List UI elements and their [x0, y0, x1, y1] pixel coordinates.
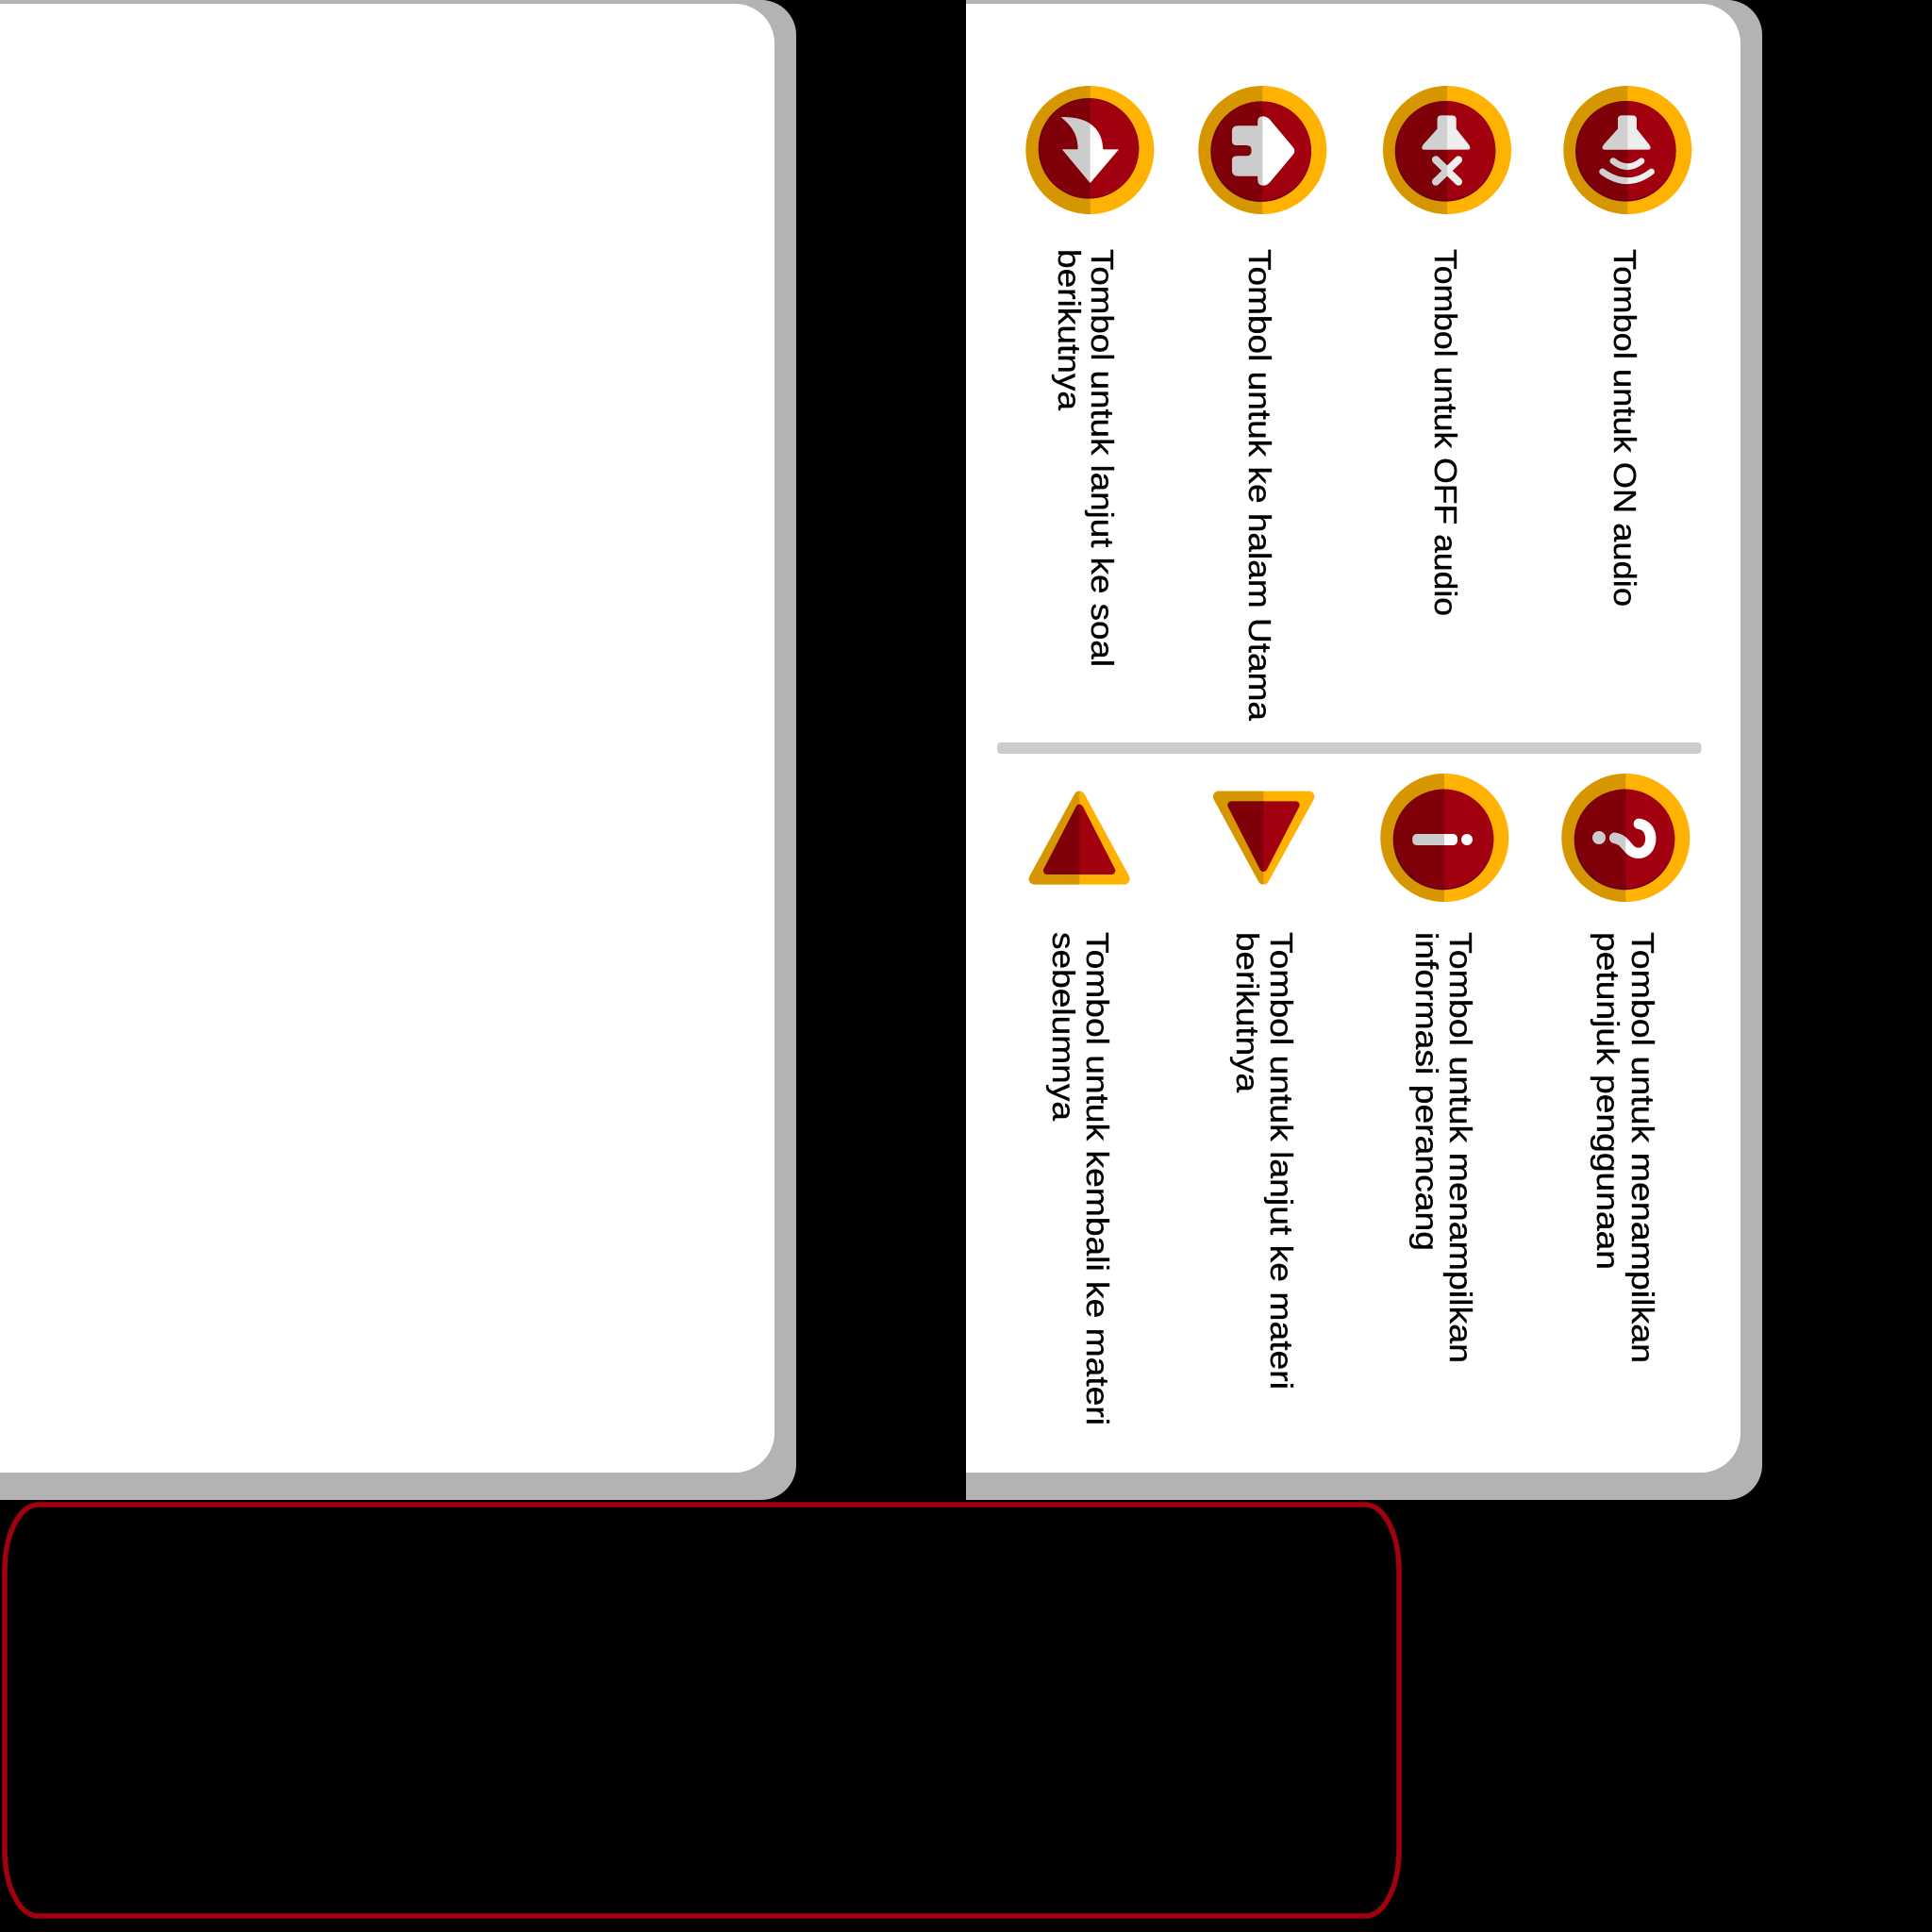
panel: left empty card: [0, 0, 796, 1500]
panel: button legend card: [966, 0, 1762, 1500]
icon: home page button: [1198, 86, 1326, 214]
text: designer information label: informasi perancang: [1409, 932, 1444, 1251]
icon: next material triangle: [1219, 797, 1308, 879]
text: next material label: [1230, 932, 1299, 1390]
text: usage help label: petunjuk penggunaan: [1591, 932, 1625, 1270]
text: next question label: Tombol untuk lanjut ke soal: [1085, 249, 1120, 667]
divider bar: [997, 742, 1702, 754]
text: audio on label: Tombol untuk ON audio: [1607, 249, 1642, 607]
text: usage help label: Tombol untuk menampilkan: [1625, 932, 1660, 1363]
text: designer information label: Tombol untuk menampilkan: [1443, 932, 1478, 1363]
text: next material label: berikutnya: [1230, 932, 1265, 1093]
text: next material label: Tombol untuk lanjut ke materi: [1264, 932, 1299, 1390]
text: designer information label: [1409, 932, 1478, 1363]
icon: previous material triangle: [1035, 797, 1124, 879]
text: next question label: [1052, 249, 1120, 667]
icon: next question arrow: [1025, 86, 1154, 214]
panel: red outlined box: [5, 1505, 1399, 1916]
text: home page label: Tombol untuk ke halam Utama: [1242, 249, 1277, 722]
text: next question label: berikutnya: [1052, 249, 1087, 411]
icon: audio off: [1383, 86, 1511, 214]
icon: usage help question mark: [1561, 774, 1690, 902]
text: previous material label: Tombol untuk kembali ke materi: [1080, 932, 1115, 1425]
text: audio off label: Tombol untuk OFF audio: [1428, 249, 1463, 616]
icon: designer information: [1380, 774, 1508, 902]
text: usage help label: [1591, 932, 1660, 1363]
text: previous material label: [1046, 932, 1115, 1425]
icon: audio on: [1563, 86, 1691, 214]
text: previous material label: sebelumnya: [1046, 932, 1081, 1122]
